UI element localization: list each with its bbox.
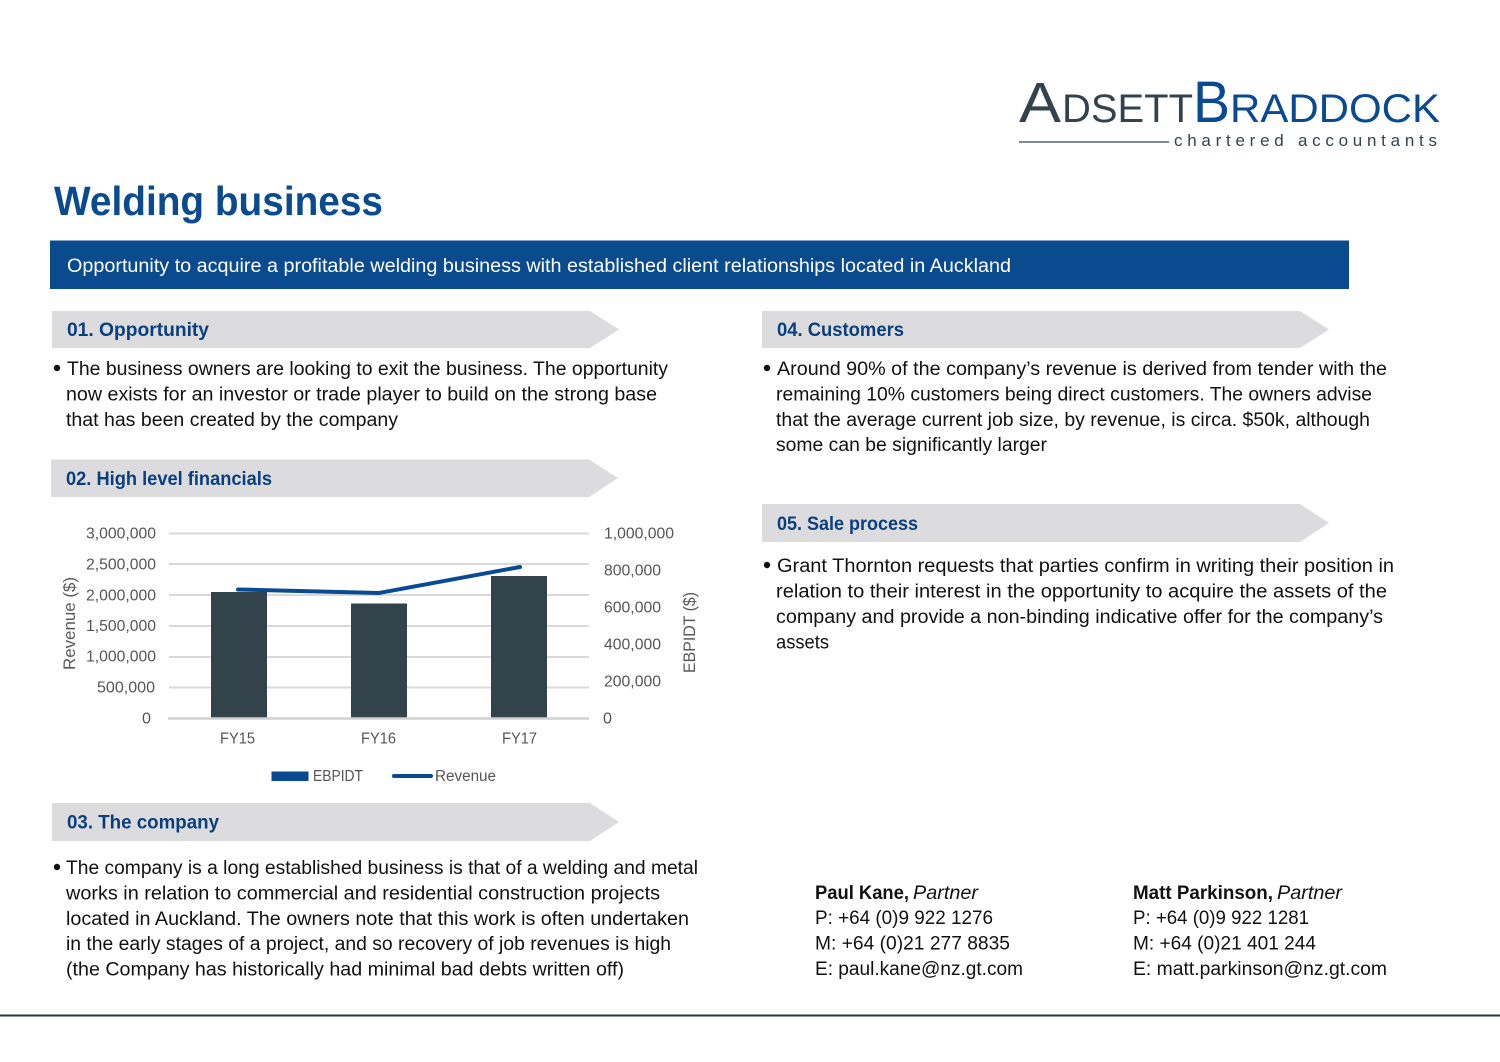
text block: company: in the early stages of a project, and so recovery of job revenues is high [66,934,671,955]
contact: Matt Parkinson: Matt Parkinson, [1133,883,1273,904]
left axis labels: 1,000,000 [86,648,156,666]
text block: sale process: company and provide a non-binding indicative offer for the company’s [776,607,1383,628]
text block: company [54,858,698,980]
heading: 02 High level financials: 02. High level financials [66,469,272,490]
axis title: Revenue: Revenue ($) [60,577,79,670]
right axis labels: 0 [603,710,612,728]
contact: Matt Parkinson [1133,883,1387,980]
text block: company: located in Auckland. The owners note that this work is often undertaken [66,909,689,930]
legend: Revenue [435,768,496,785]
contact: Paul Kane [815,883,1023,980]
contact: Paul Kane: M: +64 (0)21 277 8835 [815,934,1010,954]
right axis labels: 800,000 [604,562,661,580]
contact: Matt Parkinson: Partner [1277,883,1343,904]
heading: 01 Opportunity: 01. Opportunity [67,320,209,341]
banner: Opportunity to acquire a profitable welding business with established client relationships located in Auckland [67,256,1011,277]
left axis labels [86,526,156,728]
heading: 03 The company: 03. The company [67,812,219,834]
left axis labels: 2,000,000 [86,588,156,604]
category labels: FY15 [220,730,255,748]
text block: company: (the Company has historically had minimal bad debts written off) [66,960,624,980]
contact: Paul Kane: E: paul.kane@nz.gt.com [815,959,1023,980]
right axis labels: 1,000,000 [604,526,674,542]
category labels [220,730,537,748]
logo: Adsett Braddock [1019,70,1440,150]
contact: Paul Kane: Partner [913,883,979,904]
left axis labels: 0 [142,710,151,728]
logo: Adsett Braddock: chartered accountants [1174,131,1437,150]
contact: Matt Parkinson: M: +64 (0)21 401 244 [1133,934,1316,954]
text block: sale process [764,556,1394,654]
heading: 01 Opportunity [52,311,619,348]
logo: Adsett Braddock: RADDOCK [1230,87,1440,131]
text block: opportunity: that has been created by the company [66,410,399,431]
legend: EBPIDT [313,768,363,785]
line: Revenue [238,567,520,593]
heading: 04 Customers [762,311,1329,348]
right axis labels: 400,000 [604,636,661,654]
left axis labels: 3,000,000 [86,526,156,542]
text block: opportunity [54,359,669,431]
logo: Adsett Braddock: DSETT [1062,87,1193,131]
heading: 04 Customers: 04. Customers [777,320,904,341]
panel: 05 Sale process [762,504,1394,654]
left axis labels: 500,000 [97,680,155,696]
heading: 05 Sale process [762,504,1329,542]
text block: company: The company is a long established business is that of a welding and metal [66,858,698,879]
category labels: FY16 [361,730,396,748]
logo: Adsett Braddock: B [1193,70,1230,135]
text block: sale process: relation to their interest in the opportunity to acquire the assets of the [776,582,1387,602]
text block: customers [764,359,1387,456]
panel: 03 The company [52,803,698,980]
text block: customers: Around 90% of the company’s revenue is derived from tender with the [777,359,1387,380]
text block: company: works in relation to commercial and residential construction projects [65,884,660,904]
logo: Adsett Braddock: A [1019,71,1061,135]
text block: opportunity: The business owners are looking to exit the business. The opportunity [67,359,669,380]
contact: Paul Kane: P: +64 (0)9 922 1276 [815,908,993,929]
heading: 05 Sale process: 05. Sale process [777,514,918,535]
contact: Matt Parkinson: P: +64 (0)9 922 1281 [1133,908,1309,929]
text block: customers: that the average current job size, by revenue, is circa. $50k, although [776,410,1370,431]
panel: 04 Customers [762,311,1387,456]
contact: Paul Kane: Paul Kane, [815,883,909,904]
panel: 02 High level financials [51,460,699,785]
banner [50,240,1349,289]
heading: 02 High level financials [51,460,618,497]
bars: EBPIDT [211,576,547,718]
text block: sale process: assets [776,632,829,654]
text block: customers: remaining 10% customers being direct customers. The owners advise [776,384,1372,406]
text block: sale process: Grant Thornton requests that parties confirm in writing their position in [777,556,1394,577]
axis title: EBPIDT: EBPIDT ($) [680,592,699,673]
text block: opportunity: now exists for an investor or trade player to build on the strong base [66,384,657,406]
heading: 03 The company [52,803,619,841]
contact: Matt Parkinson: E: matt.parkinson@nz.gt.com [1133,959,1387,980]
category labels: FY17 [502,730,537,748]
text block: customers: some can be significantly larger [776,435,1048,456]
chart: revenue and EBPIDT [60,526,699,785]
right axis labels [603,526,674,728]
legend [272,768,496,785]
left axis labels: 2,500,000 [86,556,156,574]
title: Welding business [54,178,383,224]
left axis labels: 1,500,000 [86,618,156,635]
panel: 01 Opportunity [52,311,669,431]
right axis labels: 600,000 [604,600,661,616]
right axis labels: 200,000 [604,674,661,690]
